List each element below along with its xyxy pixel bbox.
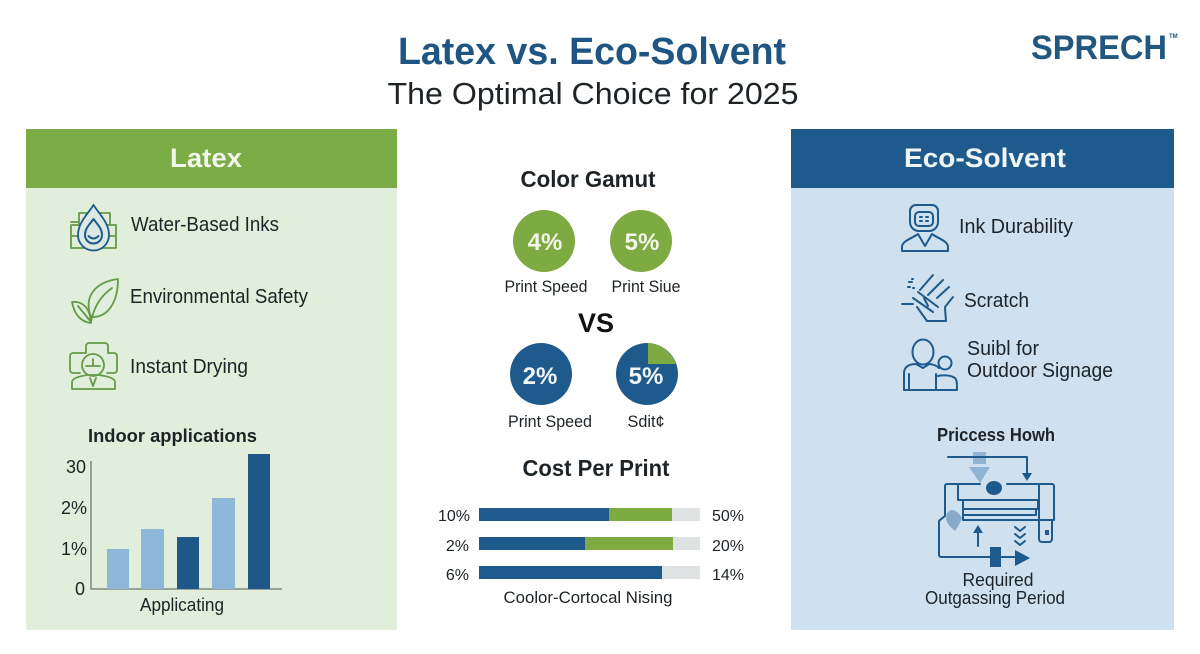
text: scratch: Scratch — [964, 290, 1029, 312]
icon: scratching hand — [902, 275, 953, 321]
title — [388, 31, 798, 111]
icon: leaf — [72, 279, 118, 323]
panel: eco-solvent — [791, 129, 1174, 630]
title: The Optimal Choice for 2025 — [388, 76, 798, 111]
stacked bars: cost per print — [438, 508, 744, 607]
stacked bars: cost per print: 14% — [712, 567, 744, 584]
heading: cost per print: Cost Per Print — [522, 455, 670, 481]
text: water-based inks: Water-Based Inks — [131, 214, 279, 236]
bar chart: indoor applications — [61, 425, 282, 615]
metric: latex 4%: Print Speed — [504, 278, 588, 296]
metric: eco-solvent 2% — [508, 343, 592, 431]
text: required outgassing period — [925, 570, 1065, 608]
icon: protective mask figure — [902, 205, 948, 251]
heading: color gamut: Color Gamut — [520, 166, 656, 192]
icon: water drop with stacked sheets — [71, 205, 116, 250]
metric: eco-solvent 2%: Print Speed — [508, 413, 592, 431]
eco-solvent header: Eco-Solvent — [904, 143, 1066, 173]
icon: two people — [904, 340, 957, 390]
stacked bars: cost per print: 2% — [446, 538, 469, 555]
text: required outgassing period: Outgassing Period — [925, 588, 1065, 608]
metric: latex 5% — [610, 210, 680, 296]
bar chart: indoor applications: 30 — [66, 457, 86, 477]
text: environmental safety: Environmental Safety — [130, 286, 308, 308]
metric: latex 4%: 4% — [528, 229, 562, 256]
stacked bars: cost per print: 6% — [446, 567, 469, 584]
process flow diagram — [939, 452, 1054, 567]
bar chart: indoor applications: Indoor applications — [88, 425, 257, 446]
bar chart: indoor applications: 2% — [61, 498, 87, 518]
text: required outgassing period: Required — [962, 570, 1034, 590]
text: suitable for outdoor signage: Outdoor Signage — [967, 360, 1113, 382]
metric: eco-solvent 5% pie — [616, 343, 678, 431]
stacked bars: cost per print: Coolor-Cortocal Nising — [504, 589, 672, 607]
metric: latex 4% — [504, 210, 588, 296]
metric: eco-solvent 5% pie: 5% — [629, 363, 663, 390]
metric: eco-solvent 5% pie: Sdit¢ — [628, 413, 664, 431]
logo: SPRECH — [1031, 29, 1167, 67]
logo: TM — [1169, 34, 1178, 40]
stacked bars: cost per print: 20% — [712, 538, 744, 555]
metric: latex 5%: 5% — [625, 229, 659, 256]
bar chart: indoor applications: Applicating — [140, 595, 224, 615]
heading: process: Priccess Howh — [937, 425, 1055, 445]
eco-solvent header — [791, 129, 1174, 188]
bar chart: indoor applications: 1% — [61, 539, 87, 559]
title: Latex vs. Eco-Solvent — [398, 31, 786, 73]
panel: color gamut — [438, 166, 744, 607]
text: instant drying: Instant Drying — [130, 356, 248, 378]
stacked bars: cost per print: 10% — [438, 508, 470, 525]
latex header — [26, 129, 397, 188]
bar chart: indoor applications: 0 — [75, 579, 85, 599]
text: ink durability: Ink Durability — [959, 216, 1073, 238]
text: suitable for outdoor signage: Suibl for — [967, 338, 1039, 360]
vs label: VS — [578, 308, 614, 338]
metric: latex 5%: Print Siue — [612, 278, 680, 296]
metric: eco-solvent 2%: 2% — [523, 363, 557, 390]
panel: latex — [26, 129, 397, 630]
text: suitable for outdoor signage — [967, 338, 1113, 382]
stacked bars: cost per print: 50% — [712, 508, 744, 525]
latex header: Latex — [170, 143, 242, 173]
icon: drying clock figure — [70, 343, 117, 389]
